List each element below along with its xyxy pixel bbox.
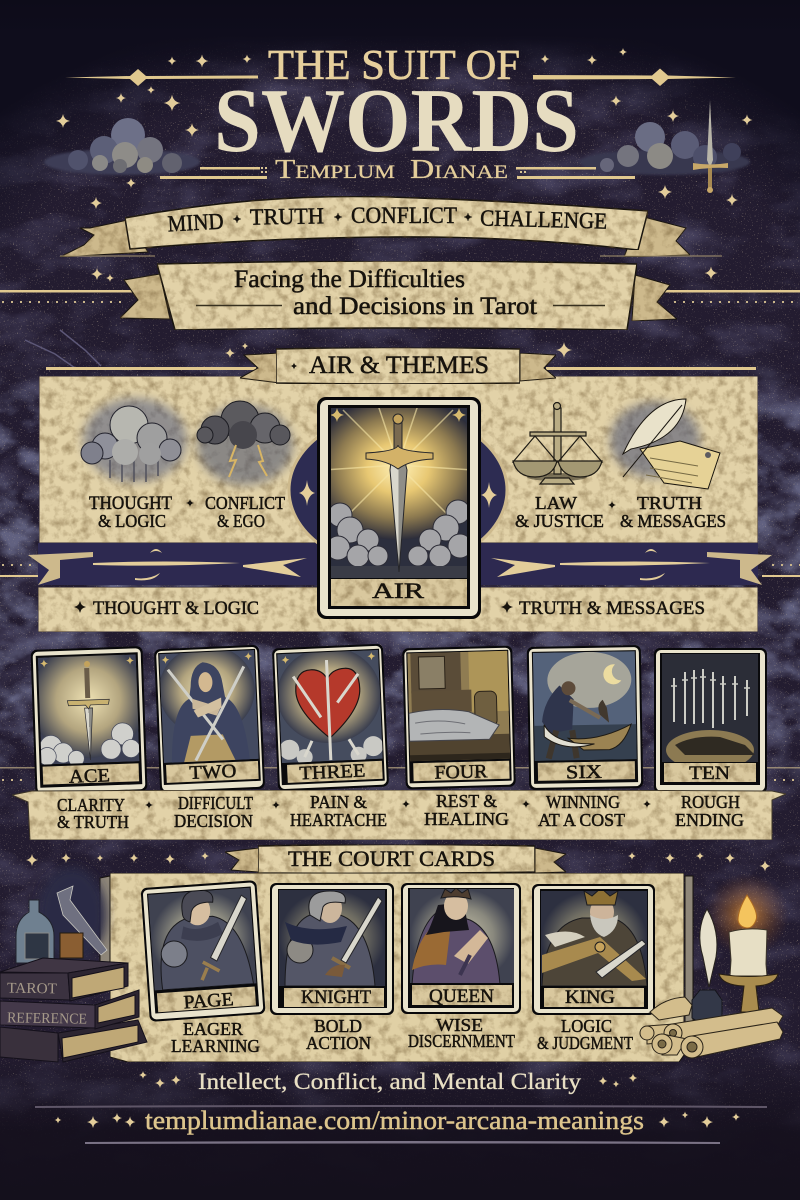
card: knight: KNIGHT [301,987,371,1008]
title rule right [533,68,736,86]
card: king: KING [565,987,615,1008]
meanings text: AT A COST [538,810,625,830]
card: three [272,644,389,791]
card: page [141,880,266,1022]
dark ribbon band [38,543,758,585]
label row: MIND [167,209,224,236]
ribbon tails [28,552,772,585]
text: truth and messages [620,493,726,531]
meanings text: HEARTACHE [290,810,387,830]
text: thought and logic [89,493,172,531]
card: king [532,884,655,1015]
text: law and justice: LAW [535,493,577,513]
card: ten [654,648,767,793]
panel: court cards parchment [100,873,693,1062]
strip text: thought and logic: THOUGHT & LOGIC [93,598,259,619]
court meanings text [171,1015,633,1056]
rules beside air and themes [46,367,756,370]
icon: thought cloud [81,398,187,482]
card: ace: ACE [69,765,110,788]
stars row beside court heading [26,852,770,872]
meanings text: WINNING [546,792,620,812]
meanings text: & TRUTH [57,812,129,832]
lower parchment strip [38,587,758,632]
banner: facing the difficulties: and Decisions in Tarot [293,293,537,320]
label row: CONFLICT [351,203,457,228]
text: conflict and ego: CONFLICT [205,493,285,513]
label row: TRUTH [250,203,324,230]
book titles: TAROT [7,981,57,997]
cloud right [580,122,750,175]
scrolls [640,997,783,1058]
court meanings text: LOGIC [561,1016,612,1036]
subtitle: templum dianae [275,154,508,184]
title: swords: SWORDS [214,70,579,171]
meanings text: ENDING [675,810,744,830]
card: two [154,643,265,793]
card: four [402,646,516,789]
banner: court cards heading [225,844,566,873]
text: conflict and ego: & EGO [217,511,265,531]
footer rules [35,1105,767,1144]
tagline stars [139,1071,638,1088]
card: page: PAGE [183,989,234,1013]
book stack: REFERENCE [7,1010,87,1028]
court meanings text: BOLD [314,1016,362,1036]
icon: separator star [186,499,194,507]
candle with flame [705,873,789,1012]
card: two: TWO [189,761,237,784]
card: ace [28,640,150,795]
meanings text: ROUGH [681,792,740,812]
subtitle: templum dianae: Templum [275,154,395,184]
panel: air and themes parchment [28,376,772,632]
footer stars [54,1112,740,1128]
banner: air and themes heading: AIR & THEMES [309,352,489,379]
ribbon flourish right [491,549,710,580]
banner: mind truth conflict challenge [60,196,722,257]
cloud left [44,118,200,175]
title: the suit of: THE SUIT OF [268,43,520,89]
banner: court cards heading: THE COURT CARDS [288,846,495,871]
bottle and quill arrow [16,867,107,963]
meanings text: DECISION [174,811,253,831]
text: thought and logic: THOUGHT [89,493,172,514]
icon: small sword top right [693,100,728,193]
card: six: SIX [566,762,602,783]
icon: storm cloud [197,401,293,485]
quill and ink bottle [692,909,722,1023]
meanings text: HEALING [424,809,509,829]
ribbon flourish left [93,549,307,580]
icon: separator star right [608,501,616,509]
subtitle: templum dianae: Dianae [410,154,508,184]
meanings text: DIFFICULT [178,793,253,813]
card: queen: QUEEN [429,986,494,1007]
meanings text: REST & [436,791,497,811]
banner: facing the difficulties: Facing the Difficulties [234,266,465,293]
book stack [0,958,147,1062]
subtitle rules [160,167,635,179]
stars: top sky [56,48,752,358]
court meanings text: LEARNING [171,1036,260,1056]
strip text: truth and messages: TRUTH & MESSAGES [519,598,705,619]
court meanings text: EAGER [183,1019,243,1039]
icon: scales [513,402,602,484]
meanings text: CLARITY [57,795,125,815]
banner: facing the difficulties [120,261,677,330]
card: queen [401,883,521,1014]
text: thought and logic: & LOGIC [98,511,166,531]
meanings text [57,791,744,832]
meanings text: PAIN & [310,792,367,812]
card: six [527,645,643,790]
ribbon: minor arcana meanings [12,790,786,840]
text: law and justice [515,493,604,531]
court meanings text: ACTION [306,1033,371,1053]
court meanings text: & JUDGMENT [537,1033,633,1053]
banner: air and themes heading [240,348,556,384]
decorative rules and dots behind banners [0,290,800,780]
card: ten: TEN [689,763,730,784]
medallion ring behind air card [289,412,507,568]
title rule left [65,69,258,86]
card: air [310,396,486,619]
label row [167,203,608,236]
icon: quill and letter [610,399,720,489]
court meanings text: DISCERNMENT [408,1031,515,1051]
card: four: FOUR [434,761,488,784]
text: truth and messages: TRUTH [637,493,702,513]
tagline: Intellect, Conflict, and Mental Clarity [198,1069,582,1094]
card: air: AIR [372,578,424,603]
text: truth and messages: & MESSAGES [620,511,726,531]
card: knight [270,883,394,1015]
text: conflict and ego [205,493,285,531]
card art: sword in glow [331,408,467,578]
card: three: THREE [299,761,366,784]
text: law and justice: & JUSTICE [515,511,604,531]
footer url: templumdianae.com/minor-arcana-meanings [145,1106,644,1135]
label row: CHALLENGE [480,205,608,234]
court meanings text: WISE [436,1015,483,1035]
